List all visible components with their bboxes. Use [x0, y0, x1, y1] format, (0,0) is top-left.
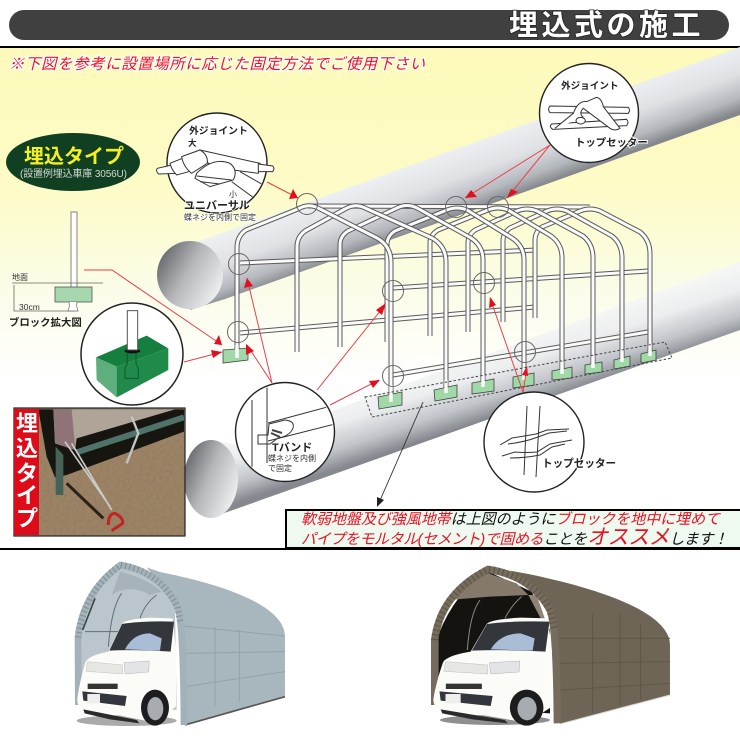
recommendation callout	[286, 510, 740, 549]
photo: buried type anchor	[14, 408, 185, 536]
callout: outer joint top setter: 外ジョイント	[561, 80, 619, 92]
photo: grey garage with car	[77, 565, 285, 726]
callout: universal outer joint: 小	[229, 190, 237, 199]
red pointer arrows	[84, 145, 550, 405]
background panel	[0, 48, 740, 510]
buried green blocks	[223, 344, 656, 409]
block cross-section diagram: 30cm	[19, 302, 40, 312]
upper concrete pipe	[157, 47, 740, 310]
callout: universal outer joint: 蝶ネジを内側で固定	[184, 212, 256, 222]
steel frame: ridge and side rails	[240, 206, 648, 375]
callout: top setter: トップセッター	[542, 458, 616, 470]
photo: buried type anchor: 埋	[16, 411, 38, 436]
callout: universal outer joint	[157, 113, 274, 222]
photo: buried type anchor: プ	[16, 506, 38, 531]
title bar	[9, 9, 729, 42]
photo: buried type anchor: タ	[16, 461, 38, 486]
callout: T band	[236, 382, 335, 482]
photo: buried type anchor: 込	[16, 436, 38, 461]
block cross-section diagram: ブロック拡大図	[9, 316, 82, 329]
callout: universal outer joint: 外ジョイント	[189, 124, 248, 137]
joint marker circles	[228, 194, 536, 386]
steel frame: arches	[237, 206, 650, 396]
recommendation callout: 軟弱地盤及び強風地帯は上図のようにブロックを地中に埋めて	[301, 511, 721, 528]
green type badge	[6, 133, 140, 191]
top divider	[0, 46, 740, 48]
callout: T band: で固定	[268, 464, 292, 473]
callout: universal outer joint: 大	[188, 138, 197, 148]
title bar: 埋込式の施工	[509, 9, 704, 42]
green type badge: (設置例埋込車庫 3056U)	[20, 167, 127, 180]
callout: block enlarged view	[81, 303, 183, 405]
callout: universal outer joint: ユニバーサル	[184, 199, 250, 212]
callout: T band: 蝶ネジを内側	[268, 453, 316, 463]
bottom divider	[0, 548, 740, 550]
recommendation callout: パイプをモルタル(セメント)で固めることをオススメします！	[301, 526, 728, 549]
dotted burial zone	[365, 342, 672, 417]
callout: T band: Tバンド	[272, 441, 312, 454]
callout: top setter	[484, 392, 616, 492]
callout: outer joint top setter: トップセッター	[575, 137, 648, 149]
black pointer arrow	[377, 402, 423, 507]
lower concrete pipe	[184, 262, 740, 518]
block cross-section diagram: 地面	[12, 272, 28, 282]
green type badge: 埋込タイプ	[24, 145, 124, 168]
usage note: ※下図を参考に設置場所に応じた固定方法でご使用下さい	[9, 56, 426, 73]
photo: brown garage with car	[433, 569, 670, 726]
block cross-section diagram	[9, 212, 103, 329]
callout: outer joint top setter	[540, 64, 648, 162]
photo: buried type anchor: イ	[16, 483, 38, 508]
